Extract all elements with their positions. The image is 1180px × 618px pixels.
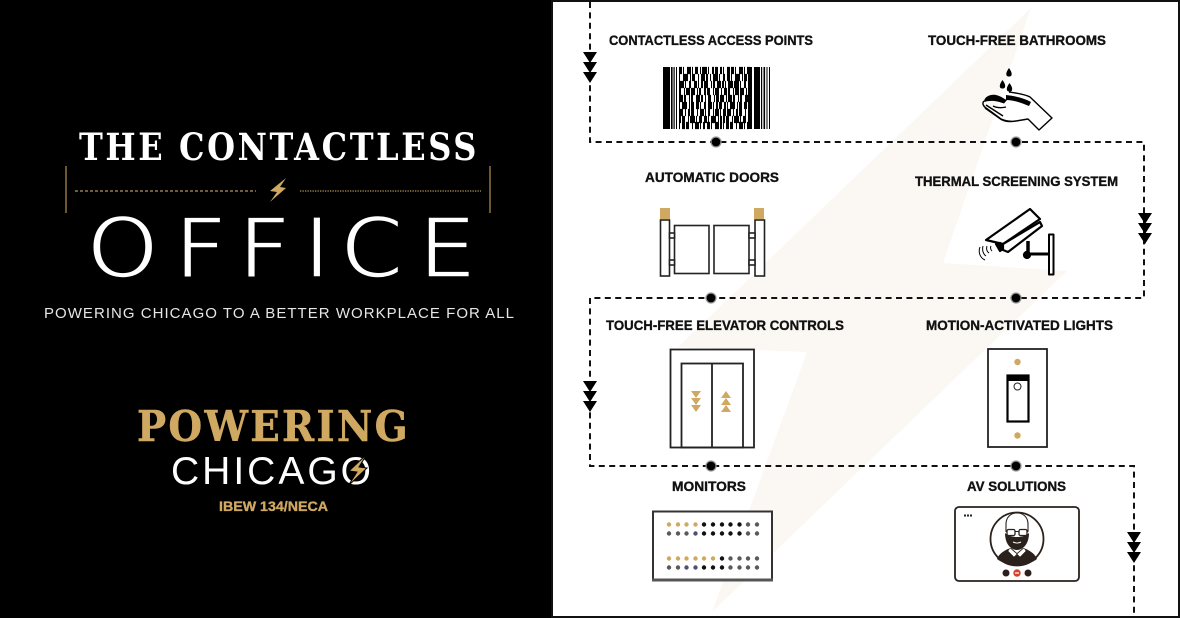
union label: IBEW 134/NECA — [219, 498, 328, 514]
title line: the contactless: THE CONTACTLESS — [79, 125, 479, 169]
arrows 1 — [583, 52, 597, 83]
dashed connector path — [583, 2, 1152, 616]
icon: elevator — [670, 350, 754, 448]
label: touch-free bathrooms: TOUCH-FREE BATHROOMS — [928, 32, 1106, 48]
node dots — [706, 137, 1021, 471]
logo word chicago: CHICAGO — [171, 450, 371, 493]
arrows 2 — [1138, 213, 1152, 244]
avatar — [997, 513, 1037, 565]
logo word powering: POWERING — [137, 402, 410, 452]
label: av solutions: AV SOLUTIONS — [967, 478, 1066, 494]
label: touch-free elevator controls: TOUCH-FREE ELEVATOR CONTROLS — [606, 317, 844, 333]
label: monitors: MONITORS — [672, 478, 746, 494]
icon: light switch — [988, 349, 1047, 447]
icon: automatic doors — [660, 208, 764, 276]
background lightning bolt — [678, 8, 1067, 612]
logo bolt — [348, 454, 367, 486]
left panel background — [0, 0, 552, 618]
logo: powering chicago — [137, 402, 410, 514]
arrows 4 — [1127, 532, 1141, 563]
icon: video call window — [955, 507, 1079, 581]
label: automatic doors: AUTOMATIC DOORS — [645, 169, 779, 185]
title block — [44, 125, 514, 322]
arrows 3 — [583, 381, 597, 412]
icon: monitor wall — [652, 512, 773, 582]
icon: security camera — [979, 209, 1054, 274]
call buttons — [1002, 569, 1032, 577]
label: contactless access points: CONTACTLESS ACCESS POINTS — [609, 32, 813, 48]
label: motion-activated lights: MOTION-ACTIVATED LIGHTS — [926, 317, 1113, 333]
icon: hand with water drops — [983, 68, 1052, 130]
label: thermal screening system: THERMAL SCREENING SYSTEM — [915, 173, 1118, 189]
title line: office: OFFICE — [87, 200, 476, 298]
tagline: POWERING CHICAGO TO A BETTER WORKPLACE FOR ALL — [44, 305, 514, 322]
right panel — [552, 1, 1179, 617]
icon: barcode — [663, 67, 770, 129]
divider with bolt — [66, 166, 490, 213]
